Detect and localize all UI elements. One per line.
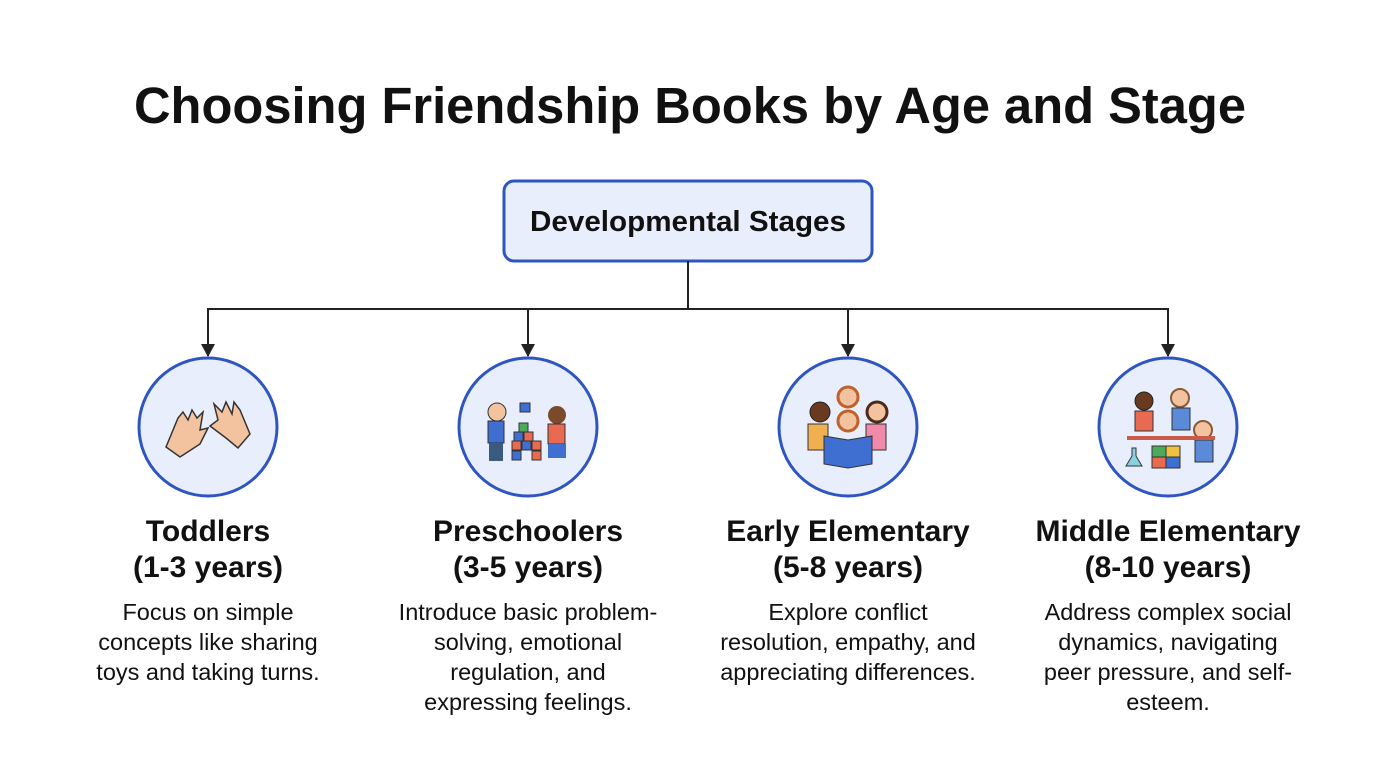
stage: middle elementary: (8-10 years)	[1085, 551, 1251, 584]
root box: Developmental Stages: Developmental Stages	[530, 206, 846, 238]
stage: toddlers: toys and taking turns.	[96, 659, 320, 685]
stage: preschoolers: (3-5 years)	[453, 551, 603, 584]
stage: early elementary: resolution, empathy, and	[720, 629, 976, 655]
stage: middle elementary: Middle Elementary	[1035, 515, 1301, 548]
stage: preschoolers: regulation, and	[450, 659, 606, 685]
title: Choosing Friendship Books by Age and Stage	[134, 77, 1246, 134]
stage: preschoolers: Preschoolers	[433, 515, 623, 548]
stage: preschoolers	[399, 515, 657, 715]
stage: early elementary: Early Elementary	[726, 515, 970, 548]
icon: hands (toddlers)	[139, 358, 277, 496]
stage: middle elementary: Address complex social	[1045, 599, 1291, 625]
stage: toddlers: Toddlers	[146, 515, 270, 548]
stage: middle elementary: peer pressure, and self-	[1044, 659, 1292, 685]
stage: preschoolers: solving, emotional	[434, 629, 622, 655]
stage: toddlers	[96, 515, 320, 685]
stage: middle elementary: esteem.	[1126, 689, 1210, 715]
stage: middle elementary: dynamics, navigating	[1058, 629, 1278, 655]
stage: early elementary: (5-8 years)	[773, 551, 923, 584]
stage: toddlers: Focus on simple	[122, 599, 294, 625]
root box: Developmental Stages	[504, 181, 872, 261]
stage: preschoolers: Introduce basic problem-	[399, 599, 657, 625]
icon: kids with puzzle (middle elementary)	[1099, 358, 1237, 496]
stage: early elementary	[720, 515, 976, 685]
stage: early elementary: Explore conflict	[768, 599, 928, 625]
stage: toddlers: concepts like sharing	[98, 629, 318, 655]
icon: kids reading (early elementary)	[779, 358, 917, 496]
connector tree arrows	[207, 261, 1169, 356]
stage: middle elementary	[1035, 515, 1301, 715]
icon: kids with blocks (preschoolers)	[459, 358, 597, 496]
stage: toddlers: (1-3 years)	[133, 551, 283, 584]
stage: preschoolers: expressing feelings.	[424, 689, 632, 715]
stage: early elementary: appreciating differences.	[720, 659, 976, 685]
